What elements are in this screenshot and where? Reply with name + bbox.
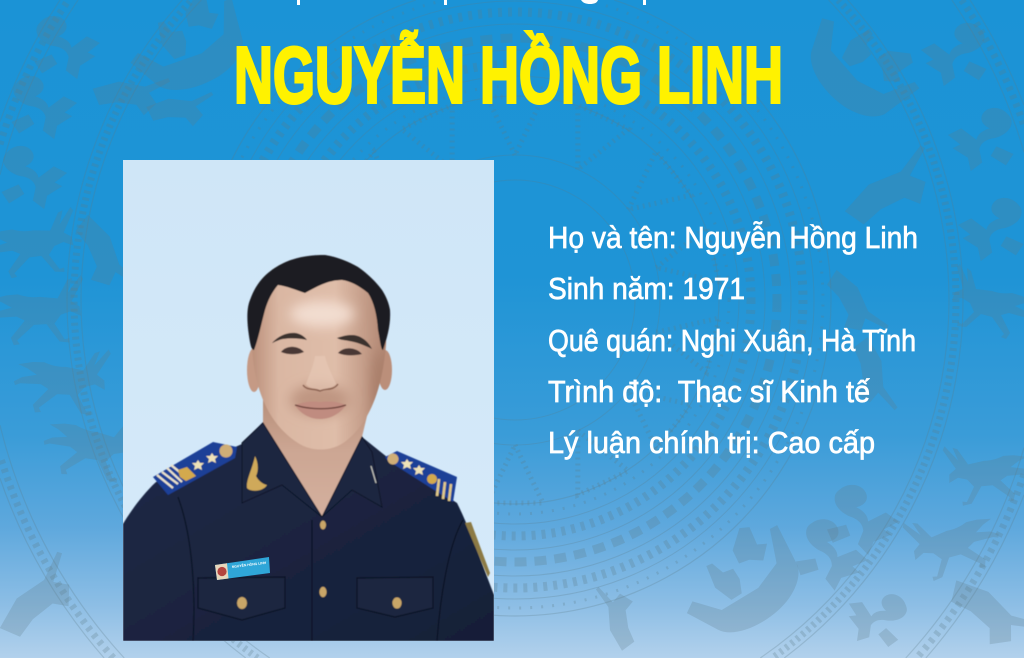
- left epaulette: [153, 442, 237, 495]
- pockets: [198, 577, 285, 620]
- collar emblem: [247, 456, 267, 491]
- panel: portrait photo: [123, 160, 494, 641]
- collar: [242, 423, 322, 517]
- right epaulette: [385, 451, 457, 502]
- hair: [247, 255, 390, 350]
- title: name: NGUYỄN HỒNG LINH: [234, 30, 783, 120]
- name badge: NGUYỄN HỒNG LINH: [232, 560, 267, 569]
- collar pin: [371, 466, 376, 483]
- mouth: [295, 401, 346, 419]
- nose: [306, 356, 336, 390]
- ears: [247, 348, 261, 392]
- uniform shirt: [123, 422, 494, 641]
- drum star gaps: [311, 97, 719, 503]
- education: Trình độ: Thạc sĩ Kinh tế: [548, 374, 870, 409]
- neck: [263, 395, 372, 517]
- photo backdrop: [123, 160, 494, 641]
- portrait: man in uniform: [123, 255, 494, 641]
- buttons: [237, 520, 402, 609]
- political theory: Lý luận chính trị: Cao cấp: [548, 425, 875, 460]
- full name: Họ và tên: Nguyễn Hồng Linh: [548, 220, 918, 255]
- sleeve seams: [178, 497, 463, 641]
- hometown: Quê quán: Nghi Xuân, Hà Tĩnh: [548, 323, 916, 358]
- eyebrows: [272, 333, 307, 343]
- name badge: [215, 557, 270, 580]
- eyes: [281, 347, 304, 354]
- birth year: Sinh năm: 1971: [548, 271, 745, 306]
- face: [252, 270, 386, 450]
- sleeve patch: [465, 522, 490, 577]
